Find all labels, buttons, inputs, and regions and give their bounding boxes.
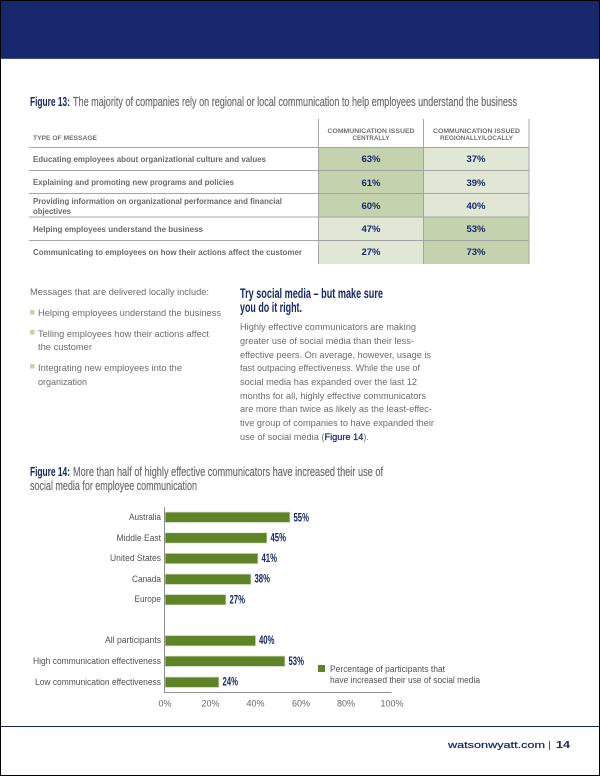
footer: watsonwyatt.com xyxy=(447,740,545,751)
text block: social media body: effective peers. On average, however, usage is xyxy=(240,350,431,361)
category labels: Middle East xyxy=(116,533,161,543)
heading: figure 14 title: More than half of highly effective communicators have increased their use of xyxy=(73,465,383,479)
heading: try social media: Try social media – but make sure xyxy=(240,286,383,301)
table values: 37% xyxy=(466,154,486,165)
heading: figure 14 title: social media for employee communication xyxy=(30,479,197,493)
text block: locally delivered messages: Messages that are delivered locally include: xyxy=(30,287,209,298)
text block: locally delivered messages: the customer xyxy=(38,342,92,353)
table: type of message by communication source xyxy=(29,119,529,264)
table values: 40% xyxy=(466,201,486,212)
table values: 73% xyxy=(466,247,486,258)
row labels xyxy=(33,154,303,257)
footer: 14 xyxy=(556,740,571,751)
category labels: Low communication effectiveness xyxy=(35,677,161,687)
legend: Percentage of participants that xyxy=(330,664,445,674)
table values xyxy=(361,154,486,258)
axis labels: 60% xyxy=(292,698,310,708)
header band xyxy=(1,1,599,59)
text block: social media body: greater use of social media than their less- xyxy=(240,336,414,347)
category labels: Australia xyxy=(129,512,161,522)
text block: locally delivered messages: organization xyxy=(38,377,87,388)
column headers: TYPE OF MESSAGE xyxy=(33,135,98,142)
row labels: objectives xyxy=(33,206,71,216)
category labels: High communication effectiveness xyxy=(33,656,161,666)
axes xyxy=(164,507,392,692)
table values: 63% xyxy=(361,154,381,165)
text block: social media body: are more than twice as likely as the least-effec- xyxy=(240,404,432,415)
axis labels: 20% xyxy=(201,698,220,708)
heading: try social media xyxy=(240,286,383,315)
column headers: CENTRALLY xyxy=(352,135,390,142)
text block: locally delivered messages: Telling employees how their actions affect xyxy=(38,329,209,340)
column headers: REGIONALLY/LOCALLY xyxy=(440,135,514,142)
column headers: COMMUNICATION ISSUED xyxy=(433,128,520,135)
category labels xyxy=(33,512,161,687)
text block: social media body: social media has expanded over the last 12 xyxy=(240,377,417,388)
axis labels: 100% xyxy=(380,698,404,708)
heading: figure 14 title: Figure 14: xyxy=(30,465,70,479)
table values: 61% xyxy=(361,178,381,189)
text block: social media body: fast outpacing effectiveness. While the use of xyxy=(240,363,420,374)
column headers xyxy=(33,128,520,142)
table values: 60% xyxy=(361,201,381,212)
text block: locally delivered messages: Helping employees understand the business xyxy=(38,308,221,319)
row labels: Educating employees about organizational culture and values xyxy=(33,154,266,164)
value labels: 41% xyxy=(262,553,277,565)
table values: 39% xyxy=(466,178,486,189)
table values: 47% xyxy=(361,224,381,235)
text block: social media body: tive group of companies to have expanded their xyxy=(240,418,434,429)
text block: social media body: use of social media (Figure 14). xyxy=(240,432,369,443)
legend: have increased their use of social media xyxy=(330,675,480,685)
table values: 53% xyxy=(466,224,486,235)
axis labels: 40% xyxy=(246,698,265,708)
bar chart: increased use of social media xyxy=(33,507,480,708)
text block: locally delivered messages: Integrating new employees into the xyxy=(38,363,182,374)
row labels: Communicating to employees on how their actions affect the customer xyxy=(33,247,303,257)
text block: social media body: months for all, highly effective communicators xyxy=(240,391,426,402)
row labels: Explaining and promoting new programs and policies xyxy=(33,177,234,187)
value labels: 45% xyxy=(270,532,286,544)
heading: try social media: you do it right. xyxy=(240,300,302,315)
category labels: All participants xyxy=(105,635,161,645)
bars xyxy=(165,512,290,688)
legend xyxy=(318,664,480,685)
heading: figure 13 title: Figure 13: xyxy=(30,95,70,109)
axis labels: 0% xyxy=(158,698,172,708)
text block: locally delivered messages xyxy=(30,287,221,388)
value labels: 55% xyxy=(294,512,309,524)
value labels: 40% xyxy=(259,635,274,647)
value labels: 53% xyxy=(288,656,304,668)
row labels: Helping employees understand the business xyxy=(33,224,203,234)
value labels: 27% xyxy=(230,594,245,606)
column headers: COMMUNICATION ISSUED xyxy=(328,128,415,135)
axis labels: 80% xyxy=(337,698,355,708)
value labels: 38% xyxy=(254,574,270,586)
row labels: Providing information on organizational performance and financial xyxy=(33,196,282,206)
category labels: United States xyxy=(110,553,161,563)
category labels: Europe xyxy=(134,594,161,604)
category labels: Canada xyxy=(132,574,161,584)
value labels: 24% xyxy=(222,676,238,688)
heading: figure 14 title xyxy=(30,465,383,493)
value labels xyxy=(222,512,309,688)
axis labels xyxy=(158,698,404,708)
table values: 27% xyxy=(361,247,381,258)
text block: social media body xyxy=(240,322,434,443)
text block: social media body: Highly effective communicators are making xyxy=(240,322,416,333)
footer xyxy=(1,726,599,751)
